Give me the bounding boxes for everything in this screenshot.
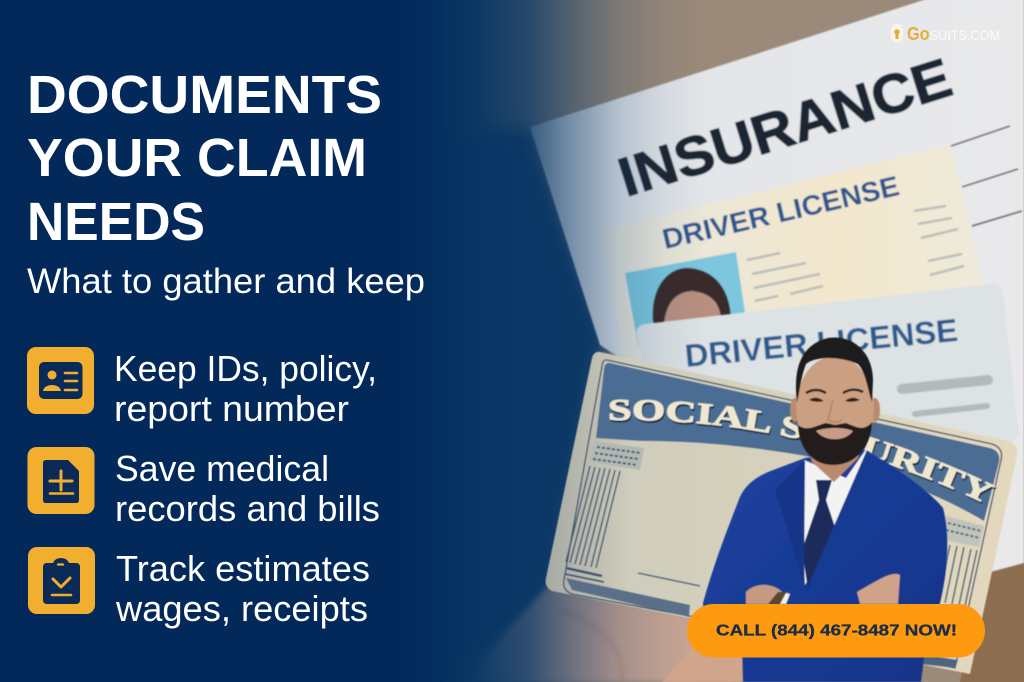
right column capital bbox=[944, 516, 984, 547]
left hand bbox=[746, 585, 785, 604]
signature line bbox=[638, 573, 700, 586]
insurance paper bbox=[530, 0, 1024, 580]
dark area left of the card bbox=[420, 127, 610, 682]
thumb crease bbox=[560, 610, 622, 682]
call to action button bbox=[687, 604, 985, 658]
card title: SOCIAL SECURITY bbox=[608, 398, 997, 504]
photo backdrop: desk surface bbox=[440, 0, 1024, 682]
title: YOUR CLAIM bbox=[27, 128, 367, 188]
right hand bbox=[857, 574, 900, 604]
right ear bbox=[870, 398, 880, 422]
nose shadow bbox=[828, 400, 842, 422]
tie bbox=[802, 480, 836, 590]
GoSuits logo bbox=[891, 24, 1000, 44]
license title: DRIVER LICENSE bbox=[659, 170, 902, 255]
attorney portrait bbox=[703, 337, 947, 682]
icon: clipboard check bbox=[28, 547, 95, 614]
wood desk corner bbox=[960, 562, 1024, 682]
item text: report number bbox=[114, 388, 349, 429]
hand holding the cards bbox=[470, 586, 730, 682]
item text: Keep IDs, policy, bbox=[114, 348, 377, 389]
brows bbox=[806, 390, 863, 393]
logo shield icon bbox=[891, 24, 903, 43]
paper heading: INSURANCE bbox=[611, 46, 959, 208]
phone number label: CALL (844) 467-8487 NOW! bbox=[716, 622, 957, 640]
title: NEEDS bbox=[27, 192, 205, 252]
shirt bbox=[802, 448, 867, 585]
arm behind the attorney bbox=[662, 570, 750, 682]
left column capital bbox=[590, 441, 644, 470]
item text: Save medical bbox=[115, 448, 329, 489]
paper form lines bbox=[951, 126, 1022, 226]
jacket bbox=[703, 450, 947, 682]
card inner frame bbox=[564, 360, 1002, 668]
mouth bbox=[818, 429, 852, 438]
driver license card, front bbox=[636, 284, 1019, 450]
icon: medical document bbox=[28, 447, 94, 514]
driver license card, back bbox=[602, 147, 990, 370]
second license title: DRIVER LICENSE bbox=[683, 312, 959, 374]
license photo bbox=[625, 252, 746, 345]
card blue band bbox=[596, 363, 999, 521]
item text: records and bills bbox=[115, 488, 380, 529]
left ear bbox=[790, 398, 800, 422]
logo wordmark: GoSUITS.COM bbox=[907, 24, 1000, 44]
left lapel bbox=[775, 460, 805, 585]
bottom right hatch bbox=[920, 654, 958, 668]
item: IDs bbox=[27, 347, 387, 429]
item text: wages, receipts bbox=[115, 588, 368, 629]
right lapel bbox=[806, 450, 888, 590]
license portrait bbox=[653, 268, 731, 345]
bottom hatched band bbox=[566, 578, 690, 617]
hair bbox=[796, 337, 873, 402]
watch and cuff bbox=[768, 592, 790, 604]
beard bbox=[798, 422, 872, 465]
item: estimates bbox=[28, 547, 380, 629]
face bbox=[796, 356, 874, 460]
second license data bars bbox=[902, 380, 988, 414]
icon: ID card bbox=[27, 347, 94, 414]
social security card bbox=[544, 351, 1018, 674]
title: DOCUMENTS bbox=[27, 65, 382, 125]
right column shaft bbox=[938, 545, 977, 606]
eyes bbox=[809, 398, 860, 402]
title bbox=[27, 65, 382, 252]
item text: Track estimates bbox=[116, 548, 370, 589]
license data lines bbox=[747, 206, 964, 301]
neck bbox=[808, 445, 862, 482]
left column shaft bbox=[565, 466, 620, 582]
license portrait face bbox=[664, 291, 721, 345]
subtitle: What to gather and keep bbox=[27, 262, 425, 301]
item: medical bbox=[28, 447, 380, 529]
